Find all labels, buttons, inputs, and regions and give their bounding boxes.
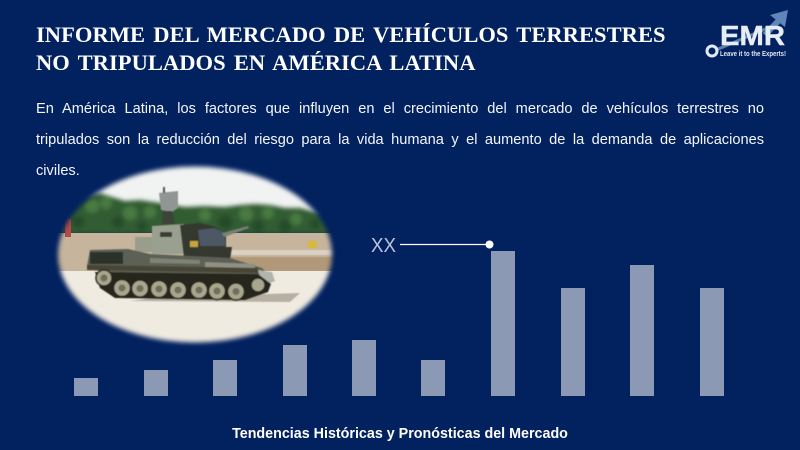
wheel hubs	[100, 274, 108, 282]
tree line	[50, 193, 340, 234]
flag and marker	[65, 219, 71, 237]
hull	[87, 249, 275, 284]
bar chart	[74, 251, 724, 396]
title: INFORME DEL MERCADO DE VEHÍCULOS TERRESTRES	[36, 22, 666, 47]
logo: EMR: EMR	[720, 20, 785, 51]
title	[36, 22, 666, 75]
logo: EMR: Leave it to the Experts!	[720, 51, 786, 58]
chart caption: Tendencias Históricas y Pronósticas del Mercado	[232, 426, 568, 442]
tracks	[95, 272, 271, 300]
road wheels	[96, 270, 265, 300]
ground	[50, 233, 340, 273]
wheel	[96, 270, 112, 286]
title: NO TRIPULADOS EN AMÉRICA LATINA	[36, 50, 476, 75]
tank	[87, 187, 275, 300]
radar dish	[159, 191, 178, 212]
body paragraph: En América Latina, los factores que influyen en el crecimiento del mercado de vehículos terrestres no	[36, 101, 764, 117]
callout: XX value marker: XX	[371, 235, 396, 257]
road	[57, 271, 333, 346]
body paragraph: tripulados son la reducción del riesgo para la vida humana y el aumento de la demanda de aplicaciones	[36, 132, 764, 148]
callout: XX value marker	[371, 235, 494, 257]
body paragraph: civiles.	[36, 163, 80, 179]
body paragraph	[36, 101, 764, 179]
turret	[152, 224, 184, 254]
sky	[87, 162, 320, 216]
logo: EMR	[706, 10, 788, 58]
photo: tank in vignette oval	[54, 162, 336, 346]
